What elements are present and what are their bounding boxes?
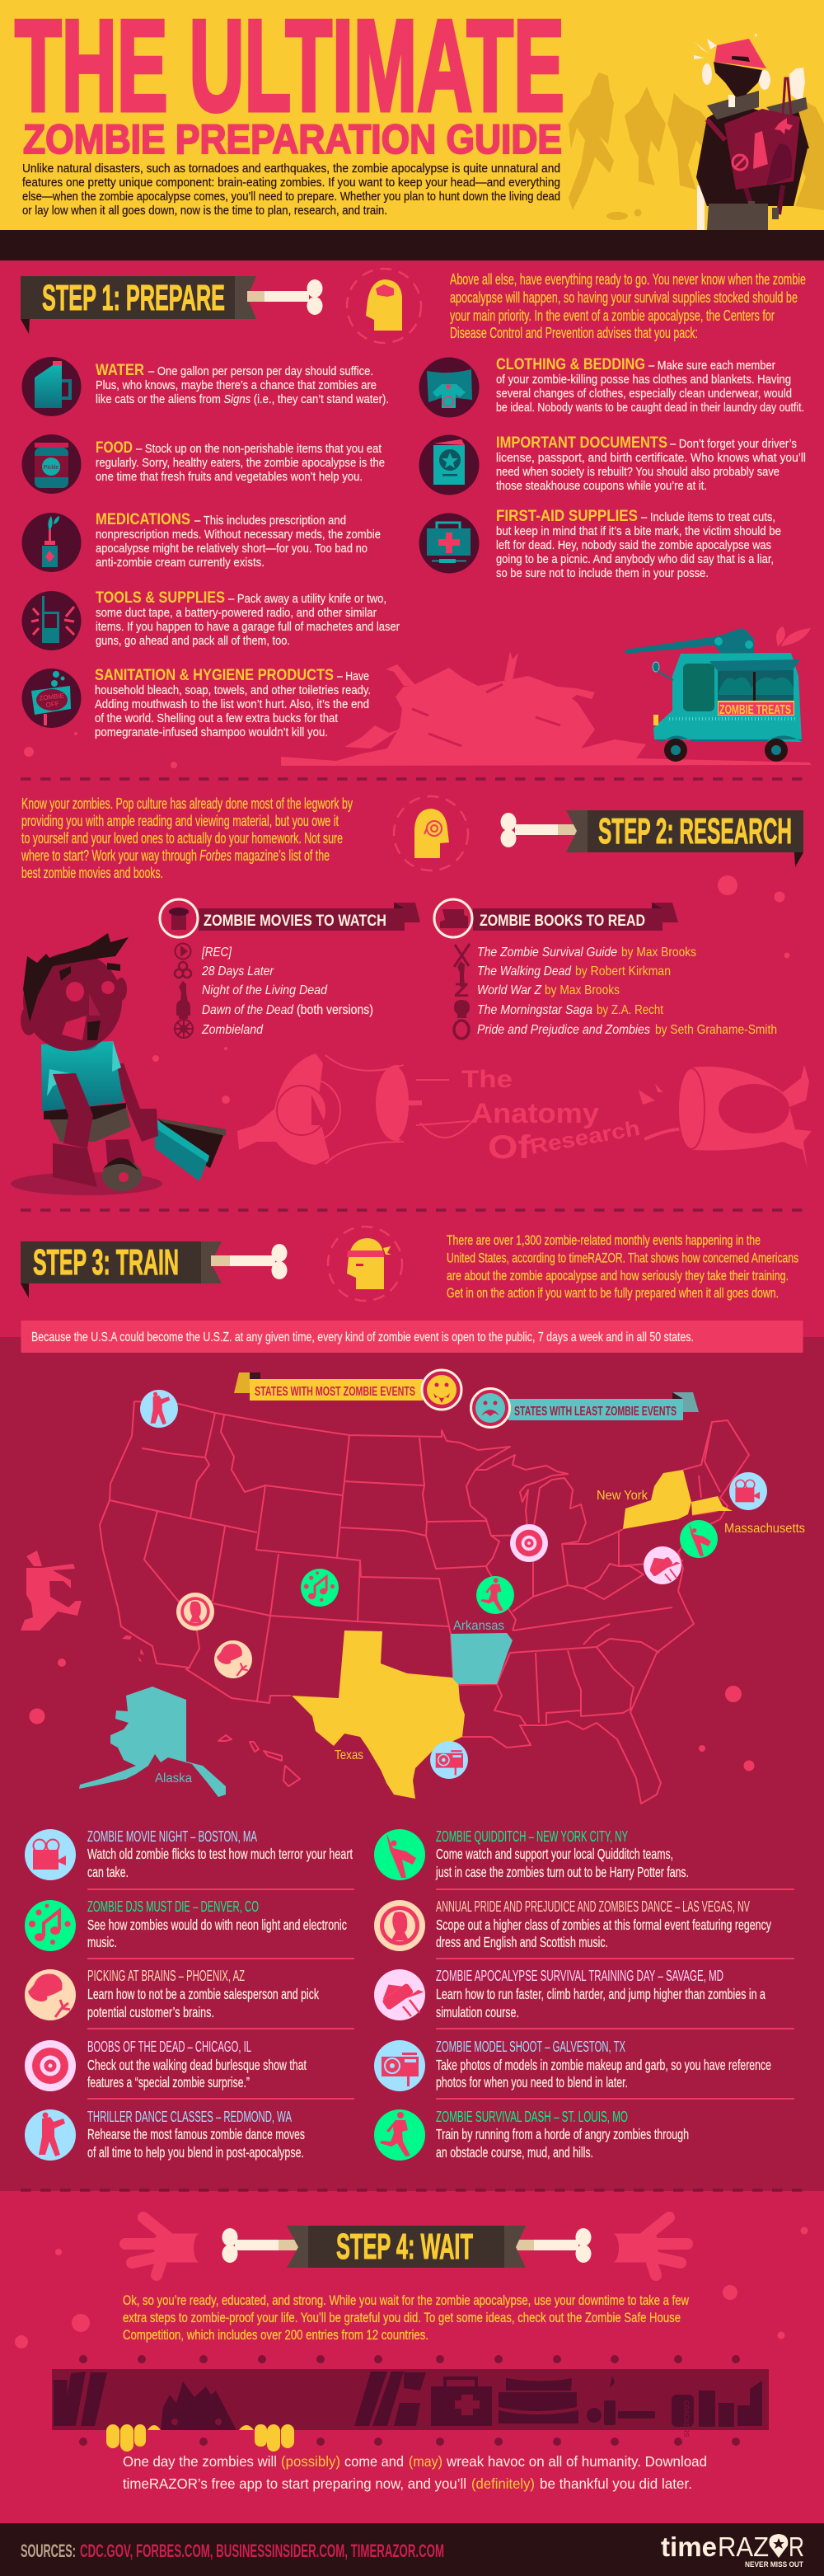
icon: water — [21, 357, 81, 416]
icon: biohazard — [175, 962, 191, 978]
icon: head with bandana — [328, 1227, 402, 1301]
event: zombie quidditch: just in case the zombies turn out to be Harry Potter fans. — [435, 1864, 689, 1880]
sources — [21, 2541, 444, 2561]
item: tools and supplies: items. If you happen to have a garage full of machetes and laser — [96, 620, 400, 634]
intro paragraph — [22, 162, 560, 218]
heading: zombie books to read: ZOMBIE BOOKS TO READ — [480, 913, 645, 930]
divider: step 2 to step 3 — [21, 1208, 803, 1212]
event: zombie movie night: can take. — [87, 1864, 129, 1880]
item: medications: – This includes prescription and — [194, 514, 346, 528]
event: zombie quidditch — [374, 1828, 794, 1890]
icon: cameo — [454, 1021, 469, 1039]
closing text: timeRAZOR’s free app to start preparing now, and you’ll — [123, 2475, 466, 2492]
icon: food — [21, 434, 81, 494]
icon: letter z: Z — [454, 979, 469, 1002]
map marker: redmond — [140, 1390, 178, 1428]
panel: step 1 prepare — [21, 269, 812, 768]
heading: zombie books to read — [434, 899, 678, 937]
intro paragraph: or lay low when it all goes down, now is the time to plan, research, and train. — [22, 204, 387, 218]
subtitle: ZOMBIE PREPARATION GUIDE — [23, 116, 562, 162]
item: sanitation and hygiene — [95, 667, 371, 739]
icon: left zombie fingers — [106, 2424, 161, 2452]
icon: documents — [419, 435, 480, 495]
movie titles — [201, 945, 373, 1037]
item: first-aid supplies: but keep in mind that if it’s a bite mark, the victim should be — [496, 524, 781, 538]
rivets below supply shelf — [79, 2438, 740, 2446]
logo: timeRAZOR: NEVER MISS OUT — [745, 2560, 803, 2569]
logo: timeRAZOR: R — [789, 2531, 804, 2562]
item: food: FOOD — [96, 439, 133, 457]
state labels: Texas — [335, 1748, 363, 1762]
closing text — [123, 2453, 707, 2492]
item: food: regularly. Sorry, healthy eaters, the zombie apocalypse is the — [96, 456, 385, 470]
item: important documents: those steakhouse coupons while you’re at it. — [496, 479, 707, 493]
state labels — [155, 1489, 805, 1785]
event: survival training day — [374, 1968, 794, 2029]
item: water — [96, 362, 389, 406]
state outlines — [100, 1401, 749, 1804]
book titles: by Z.A. Recht — [597, 1003, 663, 1017]
illustration: zombie pile — [24, 651, 812, 768]
intro text: step 2: Know your zombies. Pop culture has already done most of the legwork by — [21, 795, 353, 812]
event: zombie djs must die — [25, 1898, 354, 1959]
icon: first aid — [419, 513, 480, 574]
legend: states with least zombie events: STATES WITH LEAST ZOMBIE EVENTS — [514, 1405, 677, 1419]
movie titles: 28 Days Later — [201, 964, 274, 978]
legend: states with most zombie events — [234, 1370, 461, 1410]
icon: clothing — [419, 358, 480, 417]
heading: zombie movies to watch — [160, 899, 420, 937]
list: events right column — [374, 1828, 794, 2161]
event: picking at brains: Learn how to not be a zombie salesperson and pick — [87, 1986, 319, 2002]
list: events left column — [25, 1828, 354, 2161]
map marker: las vegas — [176, 1593, 214, 1631]
icon: skull — [454, 1000, 470, 1018]
intro text: step 4: extra steps to zombie-proof your life. You’ll be grateful you did. To get some ideas, check out the Zombie Safe House — [123, 2311, 681, 2325]
panel: step 3 train — [21, 1227, 805, 2161]
event: zombie movie night — [25, 1828, 354, 1890]
intro paragraph: else—when the zombie apocalypse comes, you’ll need to prepare. Whether you plan to hunt down the living dead — [22, 190, 560, 204]
event: zombie model shoot: ZOMBIE MODEL SHOOT – GALVESTON, TX — [436, 2039, 625, 2055]
state labels: Arkansas — [453, 1619, 504, 1633]
item: important documents: – Don’t forget your driver’s — [670, 437, 797, 451]
book titles: Pride and Prejudice and Zombies — [477, 1023, 650, 1037]
icon: bone — [501, 813, 577, 847]
intro text: step 1: Disease Control and Prevention advises that you pack: — [450, 324, 698, 341]
movie titles: Zombieland — [201, 1023, 264, 1037]
map marker: phoenix — [214, 1640, 252, 1678]
icon: right bone — [516, 2228, 592, 2263]
state labels: New York — [597, 1489, 648, 1503]
icon: right severed hand — [607, 2217, 687, 2275]
item: first-aid supplies: so be sure not to include them in your posse. — [496, 566, 709, 580]
item: first-aid supplies: – Include items to treat cuts, — [641, 510, 775, 524]
icon: bone — [247, 279, 323, 315]
event: thriller dance classes: THRILLER DANCE CLASSES – REDMOND, WA — [87, 2109, 292, 2125]
banner: step 1: STEP 1: PREPARE — [42, 278, 225, 318]
chart: united states map — [79, 1390, 805, 1804]
illustration: the anatomy of research — [237, 1053, 812, 1169]
intro text: step 2 — [21, 795, 353, 881]
event: zombie quidditch: ZOMBIE QUIDDITCH – NEW YORK CITY, NY — [436, 1828, 628, 1845]
map marker: savage — [644, 1546, 681, 1584]
event: thriller dance classes — [25, 2109, 305, 2161]
map marker: new york city — [680, 1520, 718, 1558]
intro text: step 2: where to start? Work your way through Forbes magazine’s list of the — [21, 847, 330, 864]
intro text: step 1 — [450, 270, 806, 341]
event: zombie survival dash: an obstacle course, mud, and hills. — [436, 2144, 593, 2161]
banner: step 3: STEP 3: TRAIN — [33, 1242, 179, 1283]
state: texas — [292, 1631, 465, 1799]
icon: left severed hand — [125, 2217, 205, 2275]
state: alaska — [79, 1687, 226, 1797]
item: first-aid supplies: left for dead. Hey, nobody said the zombie apocalypse was — [496, 538, 771, 552]
sources: SOURCES: — [21, 2541, 76, 2561]
event: annual pride and prejudice dance: dress and English and Scottish music. — [436, 1934, 608, 1950]
icon: head with spiral — [394, 796, 468, 870]
item: medications: apocalypse might be relatively short—for you. Too bad no — [96, 542, 368, 556]
icon: tools radio — [21, 591, 81, 650]
event: zombie movie night: ZOMBIE MOVIE NIGHT – BOSTON, MA — [87, 1828, 257, 1845]
illustration: the anatomy of research: Of — [488, 1129, 531, 1166]
book titles: The Morningstar Saga — [477, 1003, 592, 1017]
book titles — [477, 945, 777, 1037]
item: first-aid supplies — [496, 508, 781, 580]
closing text: (may) — [409, 2453, 442, 2470]
item: sanitation and hygiene: Adding mouthwash to the list won’t hurt. Also, it’s the end — [95, 697, 369, 711]
book titles: by Max Brooks — [545, 983, 620, 997]
icon: left bone — [222, 2228, 298, 2263]
closing text: be thankful you did later. — [540, 2475, 692, 2492]
item: important documents: IMPORTANT DOCUMENTS — [496, 434, 667, 452]
item: sanitation and hygiene: – Have — [337, 669, 369, 683]
item: first-aid supplies: FIRST-AID SUPPLIES — [496, 508, 638, 525]
event: zombie quidditch: Come watch and support your local Quidditch teams, — [436, 1846, 673, 1862]
event: picking at brains: potential customer’s brains. — [87, 2004, 214, 2020]
illustration: supply shelf with hiding zombie — [52, 2369, 769, 2437]
icon: food: Pickle — [44, 465, 59, 471]
event: zombie survival dash: ZOMBIE SURVIVAL DASH – ST. LOUIS, MO — [436, 2109, 628, 2125]
intro text: step 3 — [447, 1233, 798, 1301]
banner: step 3 — [21, 1241, 222, 1298]
logo: timeRAZOR: RAZ — [718, 2531, 769, 2562]
item: medications: anti-zombie cream currently exists. — [96, 556, 265, 570]
illustration: survivor with backpack — [694, 34, 809, 230]
icon: zombie off sign: ZOMBIE — [39, 692, 64, 702]
icon: wheel — [175, 1020, 193, 1038]
banner: step 4: STEP 4: WAIT — [336, 2226, 473, 2267]
book titles: by Seth Grahame-Smith — [655, 1023, 777, 1037]
book titles: World War Z — [477, 983, 542, 997]
icon: walker — [457, 961, 465, 987]
icon: head with bitten brain — [347, 269, 421, 343]
intro paragraph: features one pretty unique component: brain-eating zombies. If you want to keep your head—and everything — [22, 176, 560, 190]
icon: zombie off sign — [21, 669, 81, 728]
event: thriller dance classes: of all time to help you blend in post-apocalypse. — [87, 2144, 304, 2161]
icon: bone — [211, 1244, 287, 1279]
item: water: Plus, who knows, maybe there’s a chance that zombies are — [96, 378, 377, 392]
banner: step 2 — [566, 810, 803, 867]
item: medications: nonprescription meds. Without necessary meds, the zombie — [96, 528, 381, 542]
map marker: boston — [729, 1472, 767, 1510]
intro text: step 2: best zombie movies and books. — [21, 864, 163, 881]
icon: dome helmet — [176, 1000, 190, 1019]
book titles: by Max Brooks — [621, 945, 696, 960]
event: zombie djs must die: See how zombies would do with neon light and electronic — [87, 1917, 347, 1933]
item: tools and supplies: guns, go ahead and pack all of them, too. — [96, 634, 290, 648]
item: food: – Stock up on the non-perishable items that you eat — [136, 442, 382, 456]
item: clothing and bedding: CLOTHING & BEDDING — [496, 356, 645, 373]
movie titles: Night of the Living Dead — [202, 983, 328, 997]
list: books — [454, 944, 777, 1039]
illustration: the anatomy of research: Research — [528, 1115, 642, 1159]
item: sanitation and hygiene: SANITATION & HYGIENE PRODUCTS — [95, 667, 334, 684]
closing text: One day the zombies will — [123, 2453, 277, 2470]
list: movies — [175, 943, 373, 1038]
item: medications — [96, 511, 381, 570]
event: picking at brains — [25, 1968, 354, 2029]
item: important documents — [496, 434, 806, 493]
item: tools and supplies — [96, 589, 400, 648]
item: tools and supplies: TOOLS & SUPPLIES — [96, 589, 225, 607]
closing text: wreak havoc on all of humanity. Download — [446, 2453, 707, 2470]
movie titles: [REC] — [201, 945, 232, 960]
icon: zombie figure — [179, 981, 188, 1002]
illustration: walking zombie silhouette — [21, 1551, 755, 1771]
illustration: background zombie horde — [569, 73, 824, 220]
book titles: The Walking Dead — [477, 964, 572, 978]
illustration: the anatomy of research: Anatomy — [471, 1098, 599, 1129]
logo: timeRAZOR: time — [661, 2531, 717, 2562]
illustration: zombie treats truck: ZOMBIE TREATS — [719, 703, 791, 717]
map marker: chicago — [510, 1524, 548, 1562]
event: zombie survival dash — [374, 2109, 689, 2161]
sources: CDC.GOV, FORBES.COM, BUSINESSINSIDER.COM, TIMERAZOR.COM — [80, 2541, 444, 2561]
closing text: come and — [344, 2453, 404, 2470]
banner: step 1 — [21, 276, 256, 334]
item: clothing and bedding: – Make sure each member — [648, 359, 775, 373]
footer — [21, 2531, 804, 2569]
item: water: WATER — [96, 362, 144, 379]
state: massachusetts — [691, 1496, 733, 1515]
logo: timeRAZOR — [661, 2531, 804, 2569]
map marker: galveston — [430, 1741, 468, 1779]
rivets above supply shelf — [79, 2355, 740, 2363]
divider: step 1 to step 2 — [21, 777, 803, 781]
item: food: one time that fresh fruits and vegetables won’t help you. — [96, 470, 363, 484]
map marker: denver — [301, 1569, 339, 1607]
item: water: – One gallon per person per day should suffice. — [148, 364, 373, 378]
icon: medications — [21, 513, 81, 572]
illustration: supply shelf with hiding zombie: CRACKERS — [682, 2400, 690, 2437]
book titles: The Zombie Survival Guide — [477, 945, 617, 960]
closing text: (definitely) — [471, 2475, 535, 2492]
intro text: step 2: to yourself and your loved ones to actually do your homework. Not sure — [21, 829, 343, 847]
item: important documents: need when society is rebuilt? You should also probably save — [496, 465, 780, 479]
state: arkansas — [451, 1633, 513, 1684]
item: sanitation and hygiene: of the world. Shelling out a few extra bucks for that — [95, 711, 339, 725]
item: tools and supplies: – Pack away a utility knife or two, — [228, 592, 386, 606]
movie titles: (both versions) — [297, 1003, 373, 1017]
item: medications: MEDICATIONS — [96, 511, 190, 528]
item: tools and supplies: some duct tape, a battery-powered radio, and other similar — [96, 606, 377, 620]
decorative drops — [15, 2227, 808, 2348]
illustration: zombie treats truck — [625, 626, 811, 762]
event: boobs of the dead: Check out the walking dead burlesque show that — [87, 2057, 307, 2073]
map marker: st louis — [476, 1576, 514, 1614]
event: zombie model shoot — [374, 2039, 794, 2100]
icon: right zombie fingers — [239, 2424, 294, 2452]
item: sanitation and hygiene: household bleach, soap, towels, and other toiletries ready. — [95, 683, 371, 697]
event: survival training day: simulation course. — [436, 2004, 519, 2020]
intro text: step 2: providing you with ample reading and viewing material, but you owe it — [21, 812, 339, 829]
state: new york — [623, 1470, 691, 1529]
event: thriller dance classes: Rehearse the most famous zombie dance moves — [87, 2126, 305, 2142]
state labels: Massachusetts — [724, 1522, 805, 1536]
event: zombie model shoot: photos for when you need to blend in later. — [436, 2074, 628, 2090]
illustration: the anatomy of research: The — [461, 1066, 513, 1093]
panel: header — [15, 0, 824, 230]
item: water: like cats or the aliens from Signs (i.e., they can’t stand water). — [96, 392, 389, 406]
event: zombie survival dash: Train by running from a horde of angry zombies through — [436, 2126, 689, 2142]
item: important documents: license, passport, and birth certificate. Who knows what you’ll — [496, 451, 806, 465]
event: zombie djs must die: music. — [87, 1934, 117, 1950]
icon: play — [175, 943, 191, 960]
event: boobs of the dead: BOOBS OF THE DEAD – CHICAGO, IL — [87, 2039, 251, 2055]
state labels: Alaska — [155, 1771, 192, 1785]
legend: states with least zombie events — [471, 1388, 699, 1428]
illustration: zombie with machete — [11, 875, 789, 1195]
item: food — [96, 439, 385, 484]
item: sanitation and hygiene: pomegranate-infused shampoo wouldn’t kill you. — [95, 725, 328, 739]
item: clothing and bedding — [496, 356, 804, 415]
panel: step 2 research — [11, 795, 812, 1195]
event: zombie movie night: Watch old zombie flicks to test how much terror your heart — [87, 1846, 353, 1862]
event: boobs of the dead — [25, 2039, 354, 2100]
item: clothing and bedding: of your zombie-killing posse has clothes and blankets. Having — [496, 373, 791, 387]
event: zombie djs must die: ZOMBIE DJS MUST DIE – DENVER, CO — [87, 1898, 259, 1915]
icon: crossed tools — [454, 944, 470, 967]
intro text: step 4 — [123, 2293, 689, 2343]
closing text: (possibly) — [281, 2453, 340, 2470]
divider: step 3 to step 4 — [21, 2189, 803, 2192]
event: annual pride and prejudice dance — [374, 1898, 794, 1959]
event: boobs of the dead: features a “special zombie surprise.” — [87, 2074, 250, 2090]
panel: step 4 wait — [15, 2217, 808, 2492]
intro paragraph: Unlike natural disasters, such as tornadoes and earthquakes, the zombie apocalypse is quite unnatural and — [22, 162, 560, 176]
item: first-aid supplies: going to be a picnic. And anybody who did say that is a liar, — [496, 552, 774, 566]
intro text: step 4: Competition, which includes over 200 entries from 12 countries. — [123, 2328, 428, 2343]
book titles: by Robert Kirkman — [575, 964, 671, 978]
callout bar — [21, 1321, 803, 1353]
icon: zombie off sign: OFF — [45, 700, 59, 709]
banner: step 4 — [287, 2226, 526, 2268]
event: picking at brains: PICKING AT BRAINS – PHOENIX, AZ — [87, 1968, 245, 1984]
movie titles: Dawn of the Dead — [202, 1003, 294, 1017]
heading: zombie movies to watch: ZOMBIE MOVIES TO WATCH — [204, 913, 386, 930]
intro text: step 4: Ok, so you’re ready, educated, and strong. While you wait for the zombie apocalypse, use your downtime to take a few — [123, 2293, 689, 2308]
legend: states with most zombie events: STATES WITH MOST ZOMBIE EVENTS — [255, 1385, 415, 1399]
